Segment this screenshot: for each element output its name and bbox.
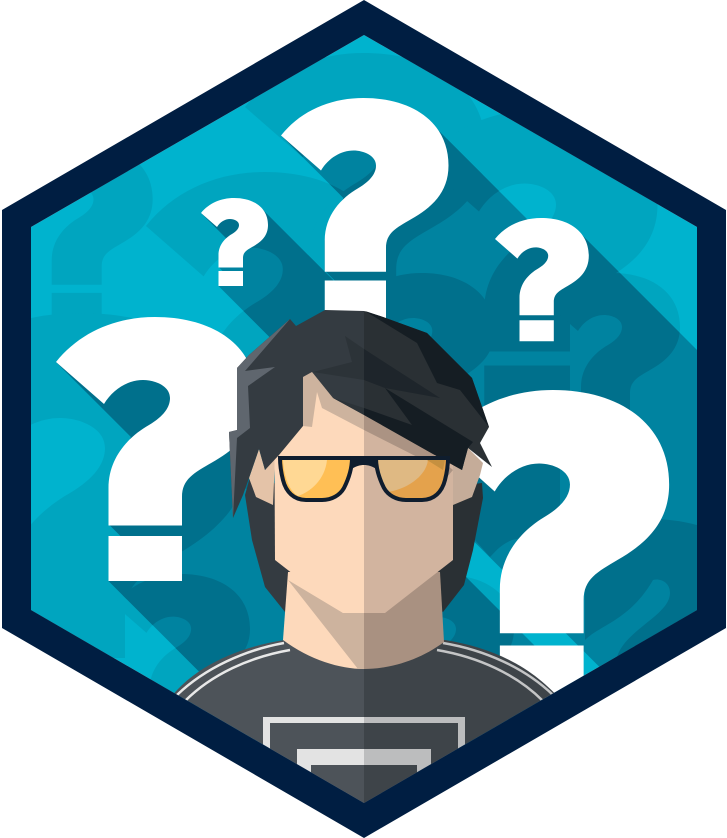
ears [249,448,483,505]
icon: large question mark right [464,390,670,698]
sunglasses [280,456,448,500]
person: man with sunglasses [174,310,554,803]
icon: small question mark right [495,218,589,341]
icon: large question mark top centre [281,98,448,318]
icon: large question mark left [56,317,257,581]
icon: small question mark left [201,198,268,286]
long shadows cast by the question marks [56,130,697,747]
chest logo [263,717,465,803]
t-shirt [174,640,554,803]
hair [229,310,492,518]
neck [283,572,444,669]
face [274,372,453,613]
side hair [245,477,483,612]
